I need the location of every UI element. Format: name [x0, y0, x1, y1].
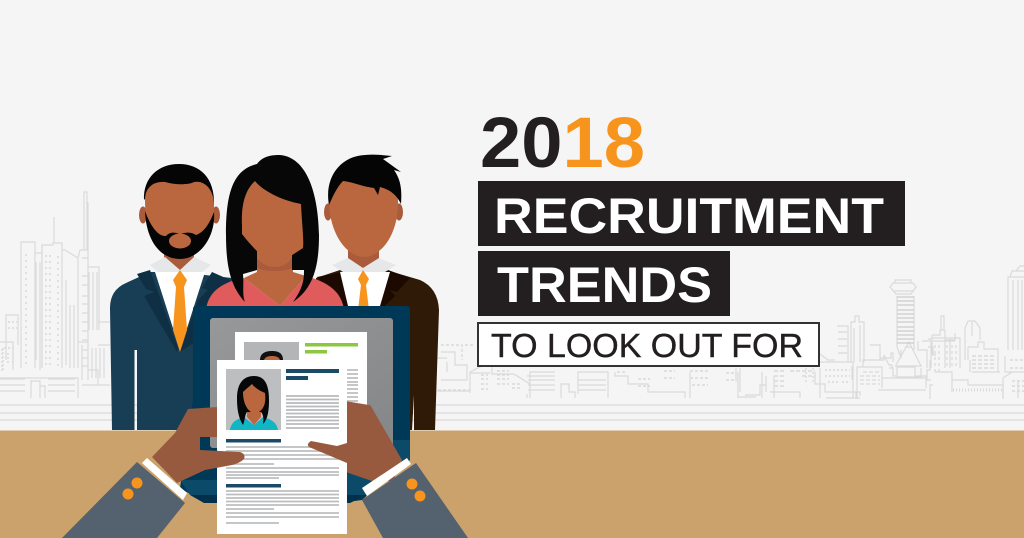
face	[145, 182, 214, 258]
section heading bar	[226, 439, 281, 442]
woman hair	[226, 155, 319, 302]
tie	[358, 270, 369, 310]
right man suit	[316, 270, 439, 430]
banner: RECRUITMENT: RECRUITMENT	[494, 188, 884, 244]
banner: TRENDS: TRENDS	[497, 257, 712, 313]
profile text lines	[286, 396, 339, 428]
back resume text lines	[347, 370, 358, 401]
ears	[139, 206, 147, 224]
left sleeve	[62, 462, 185, 538]
section heading bar 2	[226, 484, 281, 488]
mouth	[169, 234, 191, 248]
blouse	[206, 276, 344, 310]
tablet	[180, 306, 410, 503]
back resume	[235, 332, 367, 444]
collar	[150, 257, 211, 272]
tablet screen	[210, 318, 393, 448]
back resume photo	[244, 342, 299, 360]
hair	[328, 155, 401, 205]
right sleeve	[362, 463, 468, 538]
person: woman	[206, 155, 344, 310]
banner: TO LOOK OUT FOR: TO LOOK OUT FOR	[491, 327, 803, 364]
table	[0, 430, 1024, 538]
shirt	[340, 272, 390, 306]
neck	[348, 250, 379, 270]
person: right man	[316, 155, 439, 430]
left cuff	[142, 458, 187, 500]
green bars	[305, 343, 358, 346]
shirt	[155, 272, 205, 350]
hair	[144, 164, 214, 205]
right hand palm	[320, 401, 402, 481]
woman face	[242, 181, 303, 263]
right cuff	[362, 458, 411, 496]
beard	[145, 211, 214, 259]
face	[329, 172, 398, 257]
section text lines	[226, 447, 339, 478]
front resume	[217, 360, 347, 534]
photo portrait	[230, 376, 278, 430]
left man suit	[110, 272, 240, 430]
city skyline	[0, 192, 1024, 420]
left hand	[152, 407, 244, 483]
tablet body	[180, 306, 410, 503]
woman neck	[244, 250, 306, 306]
resume photo	[226, 369, 281, 430]
section text lines 2	[226, 491, 339, 523]
ears	[324, 204, 332, 220]
heading: 2018: 2018	[480, 104, 645, 183]
neck	[164, 248, 194, 270]
right thumb	[308, 425, 393, 481]
person: left man	[110, 164, 240, 430]
collar	[332, 258, 396, 272]
name bars	[286, 369, 339, 373]
tie	[173, 270, 187, 352]
